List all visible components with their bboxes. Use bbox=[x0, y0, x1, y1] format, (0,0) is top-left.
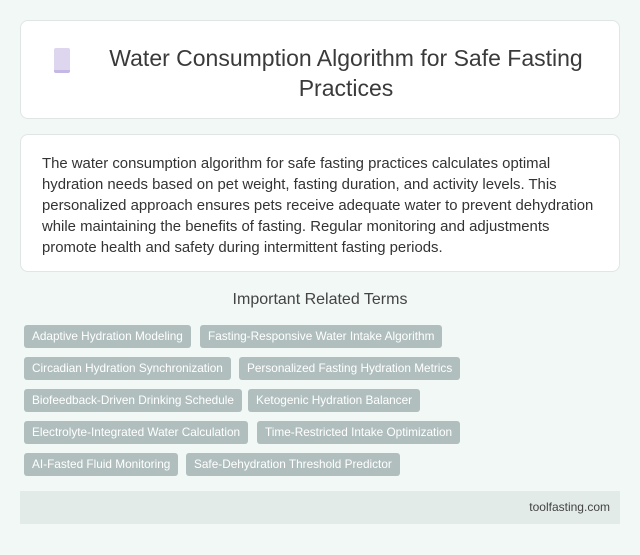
footer bbox=[20, 491, 620, 524]
tags panel bbox=[24, 325, 460, 476]
tags panel: Electrolyte-Integrated Water Calculation bbox=[32, 425, 240, 439]
tags panel: Ketogenic Hydration Balancer bbox=[256, 393, 412, 407]
tags panel: Personalized Fasting Hydration Metrics bbox=[247, 361, 452, 375]
tags panel: Biofeedback-Driven Drinking Schedule bbox=[32, 393, 234, 407]
tags panel: Adaptive Hydration Modeling bbox=[32, 329, 183, 343]
tags panel: Safe-Dehydration Threshold Predictor bbox=[194, 457, 392, 471]
title card bbox=[20, 20, 620, 119]
tags panel: Time-Restricted Intake Optimization bbox=[265, 425, 452, 439]
description card bbox=[20, 134, 620, 272]
title: Water Consumption Algorithm for Safe Fasting Practices bbox=[109, 45, 583, 101]
tags panel: AI-Fasted Fluid Monitoring bbox=[32, 457, 170, 471]
footer: toolfasting.com bbox=[529, 500, 610, 514]
description text: The water consumption algorithm for safe fasting practices calculates optimal hydration needs based on pet weight, fasting duration, and activity levels. This personalized approach ensures pets receive adequate water to prevent dehydration while maintaining the benefits of fasting. Regular monitoring and adjustments promote health and safety during intermittent fasting periods. bbox=[42, 156, 593, 256]
tags panel: Circadian Hydration Synchronization bbox=[32, 361, 223, 375]
heading: related terms: Important Related Terms bbox=[233, 291, 407, 308]
tags panel: Fasting-Responsive Water Intake Algorithm bbox=[208, 329, 434, 343]
icon: document bbox=[54, 48, 70, 73]
